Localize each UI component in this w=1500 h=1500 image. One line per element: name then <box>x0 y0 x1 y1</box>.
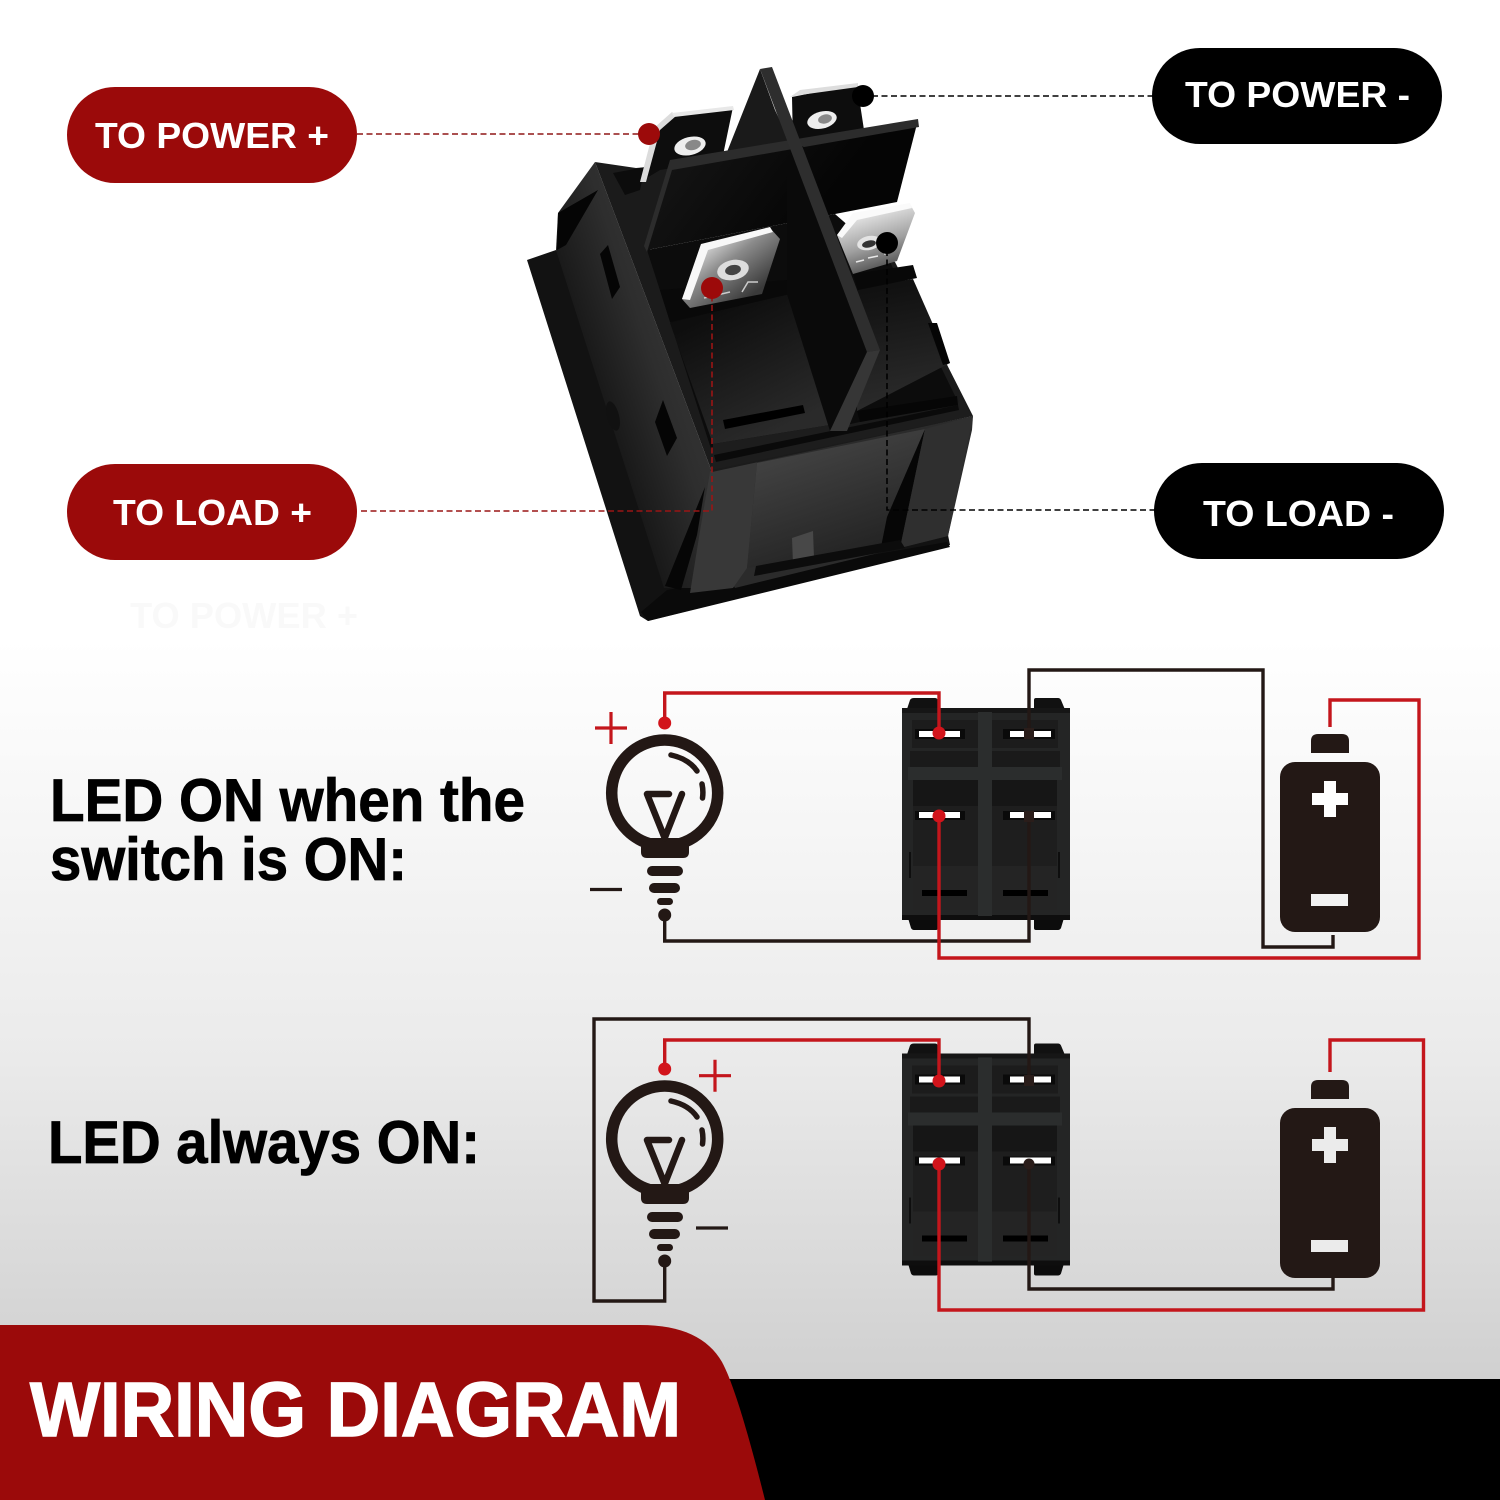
marker dot: power minus <box>852 85 874 107</box>
switch front wall <box>700 416 973 588</box>
right pillar <box>900 416 973 548</box>
leader: to power minus <box>872 95 1154 97</box>
marker dot: load plus <box>701 277 723 299</box>
label: to load plus: TO LOAD + <box>113 492 312 533</box>
leader: to load plus <box>361 295 712 511</box>
icon: bulb <box>612 1086 718 1268</box>
wire terminals <box>658 1062 1034 1170</box>
icon: battery <box>1280 1080 1380 1278</box>
diagram 2: led always on <box>594 1019 1424 1310</box>
heading: led on when switch is on: switch is ON: <box>50 826 407 893</box>
marker dot: power plus <box>638 123 660 145</box>
label: to power minus: TO POWER - <box>1185 74 1410 115</box>
heading: led always on: LED always ON: <box>48 1109 480 1176</box>
switch product illustration <box>527 67 973 621</box>
wire terminals <box>658 716 1034 822</box>
marker dot: load minus <box>876 232 898 254</box>
faint ghost label: TO POWER + <box>130 595 358 636</box>
front silver terminal <box>682 228 780 308</box>
horizontal divider fin <box>647 120 918 250</box>
right silver terminal <box>837 204 915 274</box>
label: to load minus: TO LOAD - <box>1203 493 1394 534</box>
plus sign <box>699 1060 731 1092</box>
icon: rocker switch rear <box>902 1044 1070 1276</box>
icon: rocker switch rear <box>902 698 1070 930</box>
front recessed panel <box>747 429 925 568</box>
front clip tab <box>792 531 814 564</box>
wires: black <box>594 1019 1333 1301</box>
wires: red <box>665 693 1419 958</box>
floor slots <box>723 405 805 429</box>
label: to power minus <box>1152 48 1442 144</box>
heading: led on when switch is on: LED ON when the <box>50 767 525 834</box>
title: WIRING DIAGRAM <box>30 1367 681 1453</box>
wires: red <box>665 1040 1424 1310</box>
switch left side wall <box>556 162 733 588</box>
minus sign <box>696 1226 728 1230</box>
label: to power plus <box>67 87 357 183</box>
inner long fin face <box>787 146 867 431</box>
leader: to power plus <box>357 133 642 135</box>
long cross fin <box>760 67 880 352</box>
leader: to load minus <box>887 250 1155 510</box>
heading: led on when switch is on <box>50 767 525 893</box>
top rim <box>595 162 973 472</box>
icon: bulb <box>612 740 718 922</box>
left compartment floor <box>670 294 830 444</box>
label: to load plus <box>67 464 357 560</box>
footer: red tab <box>0 1325 765 1500</box>
footer: black band <box>0 1379 1500 1500</box>
switch flange <box>527 250 950 621</box>
minus sign <box>590 888 622 891</box>
icon: battery <box>1280 734 1380 932</box>
left front pillar <box>690 462 757 593</box>
diagram 1: led on when switch on <box>590 670 1419 958</box>
back triangular fin <box>727 69 790 152</box>
back terminal right <box>792 84 864 145</box>
wires: black <box>665 670 1333 947</box>
back terminal left <box>640 107 733 182</box>
right compartment floor <box>857 279 950 411</box>
label: to power plus: TO POWER + <box>95 115 329 156</box>
plus sign <box>595 712 627 744</box>
top cavity <box>647 214 957 455</box>
side slots <box>600 245 620 299</box>
label: to load minus <box>1154 463 1444 559</box>
front wedge shadow <box>880 429 925 552</box>
